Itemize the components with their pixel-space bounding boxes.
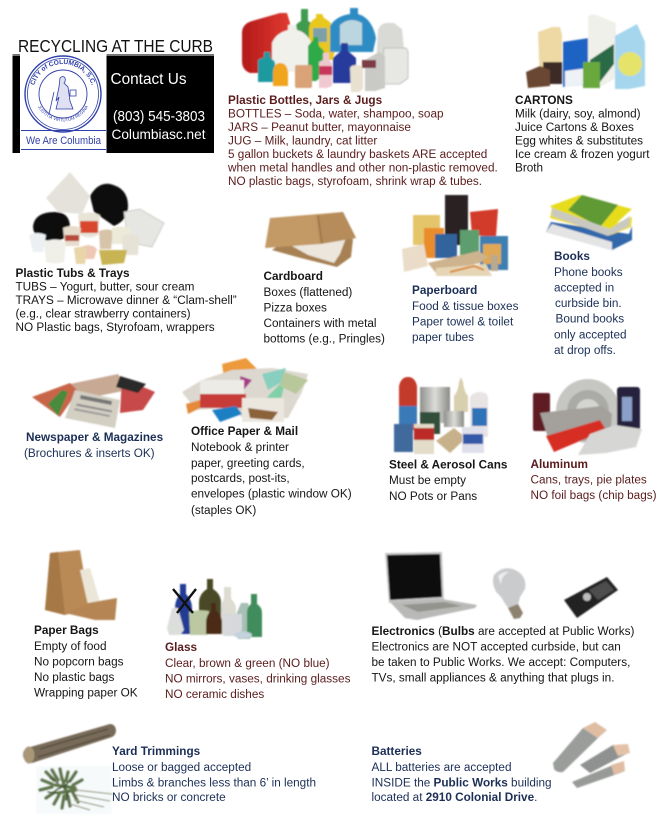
- heading and text: Paperboard: [412, 284, 477, 297]
- heading and text: Aluminum: [530, 458, 588, 471]
- heading and text: be taken to Public Works. We accept: Computers,: [372, 656, 630, 669]
- icon: batteries photo: [553, 722, 630, 788]
- heading and text: [530, 458, 657, 502]
- heading and text: accepted in: [554, 282, 614, 294]
- panel: paperboard: [402, 195, 519, 344]
- heading and text: Electronics (Bulbs are accepted at Public Works): [372, 625, 635, 638]
- panel: office paper and mail: [182, 358, 352, 517]
- icon: light bulb photo: [493, 568, 525, 619]
- icon: city of Columbia seal: We Are Columbia: [26, 135, 102, 147]
- icon: books photo: [546, 195, 632, 250]
- heading and text: Bound books: [556, 312, 624, 326]
- heading and text: [24, 431, 164, 460]
- heading and text: Broth: [515, 162, 543, 174]
- heading and text: TUBS – Yogurt, butter, sour cream: [16, 280, 195, 294]
- heading and text: CARTONS: [515, 94, 573, 107]
- heading and text: No popcorn bags: [34, 656, 124, 668]
- heading and text: No plastic bags: [34, 671, 114, 684]
- heading and text: [372, 625, 635, 684]
- heading and text: [191, 425, 352, 517]
- heading and text: (staples OK): [191, 504, 256, 517]
- heading and text: Office Paper & Mail: [191, 425, 298, 438]
- icon: glass bottles photo: [167, 579, 262, 639]
- heading and text: when metal handles and other non-plastic removed.: [227, 162, 498, 174]
- heading and text: located at 2910 Colonial Drive.: [372, 791, 537, 804]
- panel: yard trimmings: [23, 724, 316, 814]
- heading and text: Steel & Aerosol Cans: [389, 458, 508, 472]
- icon: crossed-out blue bottle: [173, 589, 196, 613]
- panel: plastic bottles: [227, 8, 498, 188]
- heading and text: 5 gallon buckets & laundry baskets ARE accepted: [228, 148, 487, 161]
- icon: mobile phone photo: [564, 577, 618, 618]
- heading and text: Pizza boxes: [264, 302, 327, 314]
- heading and text: [264, 270, 385, 346]
- icon: cartons photo: [526, 14, 645, 89]
- heading and text: Must be empty: [389, 474, 466, 487]
- heading and text: postcards, post-its,: [191, 472, 290, 485]
- icon: plastic bottles photo: [242, 8, 408, 92]
- heading and text: Loose or bagged accepted: [112, 761, 251, 774]
- heading and text: bottoms (e.g., Pringles): [264, 332, 385, 346]
- heading and text: [554, 250, 627, 357]
- contact text: (803) 545-3803: [113, 108, 205, 125]
- heading and text: JARS – Peanut butter, mayonnaise: [228, 121, 411, 134]
- panel: cartons: [515, 14, 650, 174]
- heading and text: Cardboard: [264, 270, 323, 283]
- contact text: [110, 71, 206, 142]
- icon: cardboard photo: [265, 212, 356, 267]
- heading and text: JUG – Milk, laundry, cat litter: [228, 134, 377, 148]
- heading and text: NO bricks or concrete: [112, 791, 226, 804]
- heading and text: only accepted: [554, 328, 627, 342]
- heading and text: Yard Trimmings: [112, 745, 201, 758]
- heading and text: NO Pots or Pans: [389, 490, 477, 503]
- icon: newspapers photo: [32, 374, 155, 428]
- heading and text: BOTTLES – Soda, water, shampoo, soap: [228, 108, 444, 120]
- heading and text: Limbs & branches less than 6’ in length: [112, 776, 316, 790]
- heading and text: Boxes (flattened): [264, 286, 352, 299]
- panel: header contact block: [12, 36, 214, 153]
- heading and text: TVs, small appliances & anything that plugs in.: [372, 672, 614, 684]
- heading and text: (Brochures & inserts OK): [24, 447, 155, 460]
- icon: aluminum photo: [533, 379, 642, 455]
- heading and text: Books: [554, 250, 590, 263]
- heading and text: Notebook & printer: [191, 441, 289, 454]
- contact text: Columbiasc.net: [112, 126, 206, 142]
- heading and text: Plastic Bottles, Jars & Jugs: [228, 94, 383, 107]
- heading and text: curbside bin.: [555, 297, 622, 310]
- heading and text: [515, 94, 650, 174]
- heading and text: Paper Bags: [34, 624, 99, 637]
- panel: plastic tubs and trays: [16, 172, 237, 334]
- heading and text: TRAYS – Microwave dinner & “Clam-shell”: [16, 294, 237, 307]
- panel: paper bags: [34, 550, 138, 700]
- black contact box: [12, 54, 214, 153]
- icon: cans photo: [394, 377, 488, 454]
- heading and text: [165, 641, 351, 701]
- heading and text: Electronics are NOT accepted curbside, but can: [372, 640, 621, 654]
- heading and text: Wrapping paper OK: [34, 686, 138, 700]
- heading and text: Cans, trays, pie plates: [530, 474, 647, 486]
- heading and text: Batteries: [372, 745, 422, 758]
- heading and text: [16, 267, 237, 334]
- heading and text: NO plastic bags, styrofoam, shrink wrap & tubes.: [228, 175, 482, 188]
- icon: city of Columbia seal: CITY of COLUMBIA, S.C.: [30, 59, 95, 85]
- heading and text: [112, 745, 316, 804]
- heading and text: Clear, brown & green (NO blue): [165, 657, 330, 670]
- icon: paperboard photo: [402, 195, 508, 276]
- icon: paper bags photo: [45, 550, 117, 620]
- heading and text: [389, 458, 508, 503]
- heading and text: [34, 624, 138, 700]
- heading and text: INSIDE the Public Works building: [372, 776, 552, 790]
- icon: laptop photo: [385, 552, 477, 620]
- icon: leafy branches photo: [36, 766, 112, 814]
- heading and text: Phone books: [554, 266, 623, 279]
- icon: office paper photo: [182, 358, 308, 422]
- heading and text: NO ceramic dishes: [165, 688, 264, 701]
- heading and text: [227, 94, 498, 188]
- heading and text: at drop offs.: [554, 344, 616, 357]
- heading and text: Juice Cartons & Boxes: [515, 121, 634, 134]
- heading and text: Empty of food: [34, 640, 106, 653]
- panel: electronics: [372, 552, 635, 684]
- heading and text: Ice cream & frozen yogurt: [515, 148, 650, 161]
- heading and text: (e.g., clear strawberry containers): [16, 308, 191, 320]
- heading and text: Glass: [165, 641, 197, 654]
- heading and text: Containers with metal: [264, 317, 376, 330]
- title: RECYCLING AT THE CURB: [18, 36, 213, 56]
- heading and text: Milk (dairy, soy, almond): [515, 108, 641, 120]
- panel: steel and aerosol cans: [389, 377, 508, 503]
- icon: city of Columbia seal: [21, 55, 106, 150]
- heading and text: Egg whites & substitutes: [515, 134, 643, 148]
- panel: cardboard: [264, 212, 385, 346]
- heading and text: NO mirrors, vases, drinking glasses: [165, 672, 351, 686]
- panel: glass: [165, 579, 351, 701]
- panel: batteries: [372, 722, 630, 804]
- heading and text: Newspaper & Magazines: [26, 431, 164, 444]
- heading and text: paper, greeting cards,: [191, 457, 305, 470]
- contact text: Contact Us: [110, 71, 186, 88]
- icon: city of Columbia seal: JUSTITIA VIRTUTUM REGINA: [38, 106, 88, 122]
- heading and text: ALL batteries are accepted: [372, 761, 512, 774]
- heading and text: Plastic Tubs & Trays: [16, 267, 130, 280]
- heading and text: Paper towel & toilet: [412, 316, 514, 328]
- heading and text: paper tubes: [412, 331, 474, 344]
- heading and text: NO Plastic bags, Styrofoam, wrappers: [16, 321, 215, 334]
- heading and text: [412, 284, 519, 344]
- icon: tubs and trays photo: [29, 172, 164, 265]
- panel: aluminum: [530, 379, 657, 502]
- heading and text: NO foil bags (chip bags): [530, 489, 657, 502]
- heading and text: envelopes (plastic window OK): [191, 488, 352, 500]
- icon: log photo: [23, 724, 116, 764]
- panel: newspaper and magazines: [24, 374, 164, 460]
- heading and text: [372, 745, 552, 804]
- heading and text: Food & tissue boxes: [412, 300, 519, 313]
- panel: books: [546, 195, 632, 357]
